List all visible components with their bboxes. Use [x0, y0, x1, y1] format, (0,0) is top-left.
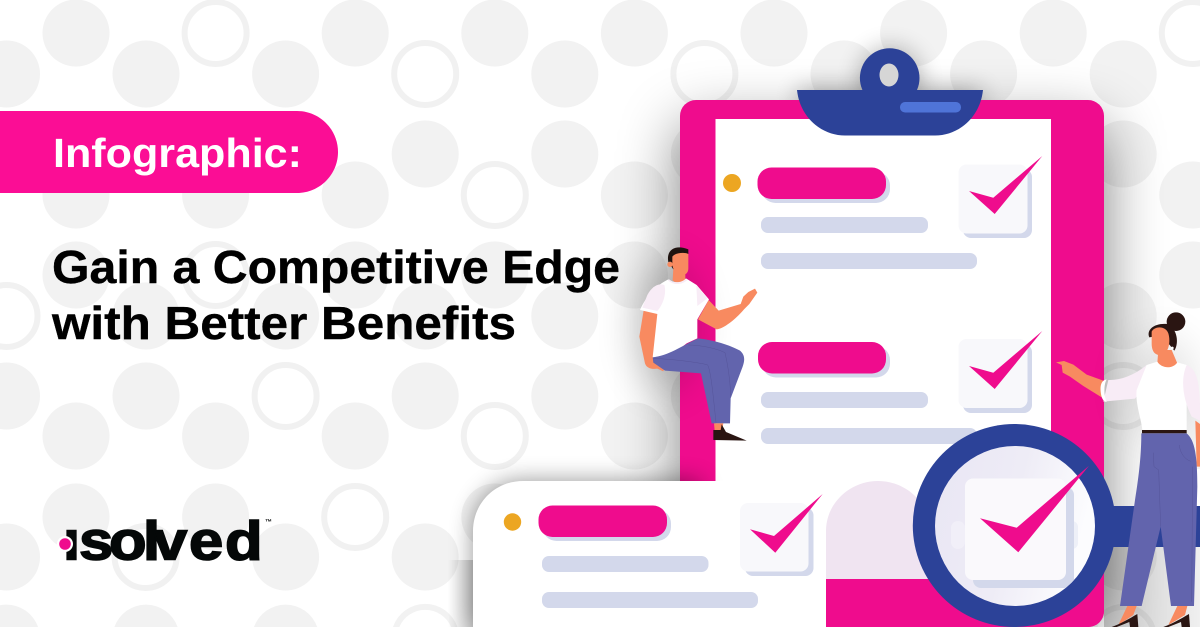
logo: isolved: [57, 519, 272, 561]
label pill: Infographic: Infographic:: [53, 130, 302, 176]
logo: isolved: ™: [265, 519, 272, 526]
clipboard drop shadow: [680, 48, 1200, 627]
bottom card with checklist item 3: [473, 481, 826, 627]
title: with Better Benefits: [51, 297, 516, 349]
lavender arch and pink base: [826, 481, 1104, 627]
magnifying glass: [913, 424, 1200, 627]
checklist item 1: [723, 156, 1042, 269]
illustration: seated man: [639, 247, 757, 441]
figure shadows: [635, 260, 1195, 435]
title: [51, 241, 620, 349]
clipboard clip: [797, 48, 983, 136]
checklist item 2: [758, 331, 1042, 444]
clipboard board: [680, 100, 1104, 627]
logo: isolved: isolved: [63, 511, 263, 572]
title: Gain a Competitive Edge: [52, 241, 620, 293]
bottom card shadow: [448, 481, 700, 627]
label pill: Infographic: [0, 111, 338, 193]
illustration: standing woman: [1056, 312, 1200, 627]
